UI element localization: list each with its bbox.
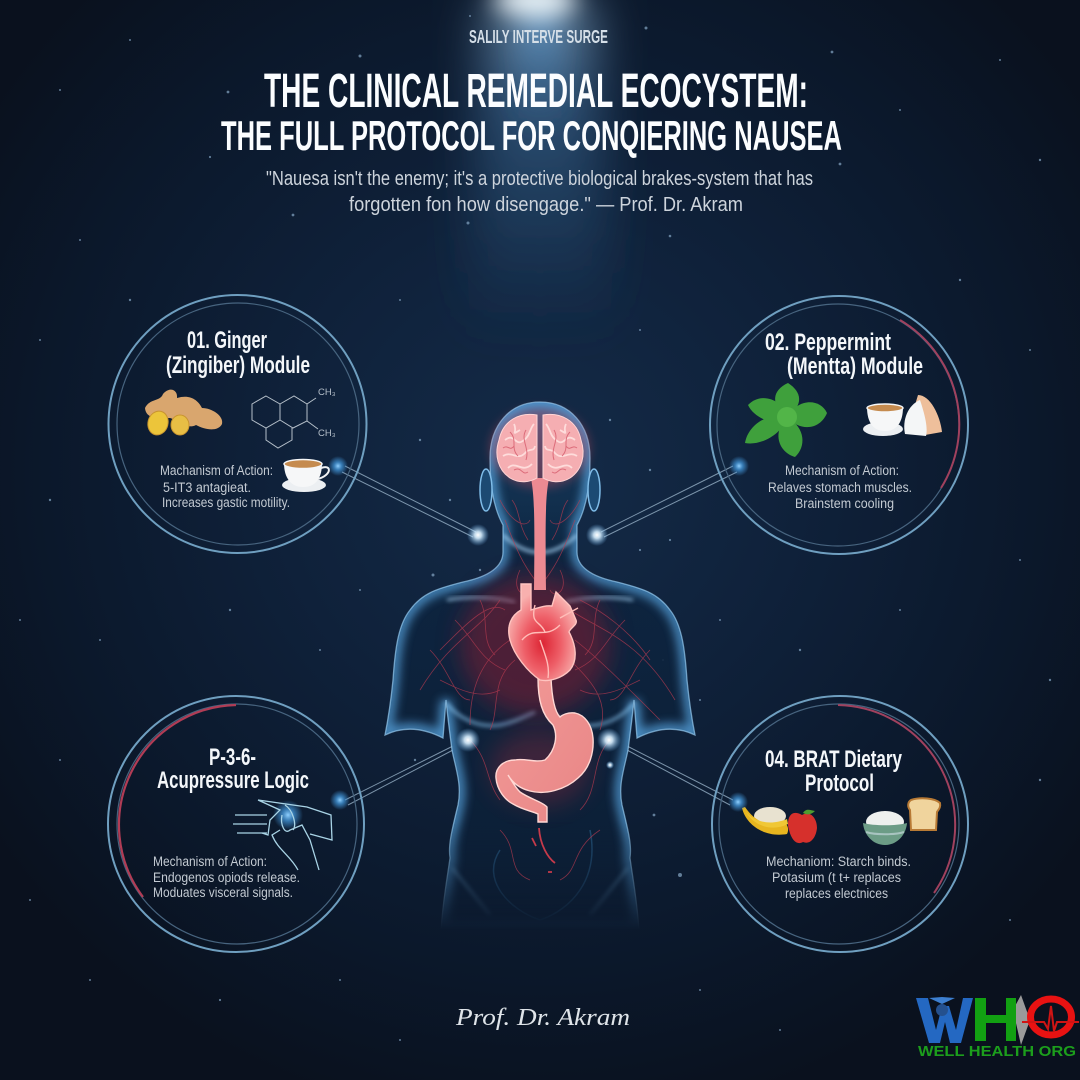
heading: 02. Peppermint <box>765 329 891 356</box>
red nerve network <box>420 500 675 880</box>
panel: 02 peppermint module <box>710 296 968 554</box>
icon: chemical structure <box>252 387 336 448</box>
connector glow points <box>456 524 621 769</box>
heading <box>157 744 309 794</box>
heading <box>765 746 902 797</box>
mechanism text: Moduates visceral signals. <box>153 885 293 900</box>
mechanism text: Mechanism of Action: <box>785 463 899 478</box>
heading: Acupressure Logic <box>157 767 309 794</box>
heading: (Zingiber) Module <box>166 352 310 379</box>
panel rings <box>108 696 364 952</box>
heading: 01. Ginger <box>187 327 267 354</box>
heart <box>509 584 578 681</box>
brain <box>497 414 583 482</box>
spinal cord <box>531 478 549 590</box>
icon: tea cup <box>282 460 329 492</box>
central human body <box>385 402 695 930</box>
mechanism text: Increases gastic motility. <box>162 495 290 510</box>
panel rings <box>108 295 366 553</box>
light beam <box>465 0 615 340</box>
mechanism text: replaces electnices <box>785 886 888 901</box>
icon: rice bowl and toast <box>863 798 940 845</box>
heading <box>166 327 310 379</box>
heading: P-3-6- <box>209 744 256 771</box>
heading: Protocol <box>805 770 874 797</box>
mechanism text <box>766 854 911 901</box>
heading: 04. BRAT Dietary <box>765 746 902 773</box>
panel rings <box>712 696 968 952</box>
node <box>729 456 749 476</box>
mechanism text: Brainstem cooling <box>795 496 894 511</box>
mechanism text <box>768 463 912 511</box>
body silhouette <box>385 402 695 930</box>
panel: 04 BRAT dietary protocol <box>712 696 968 952</box>
heading: (Mentta) Module <box>787 353 923 380</box>
ears <box>480 469 600 511</box>
connector lines <box>342 466 737 805</box>
node <box>330 790 350 810</box>
panel: 03 acupressure logic <box>108 696 364 952</box>
icon: chemical structure: CH₃ <box>318 428 336 439</box>
quote <box>266 168 813 216</box>
icon: ginger root <box>145 390 222 437</box>
mechanism text: 5-IT3 antagieat. <box>163 480 251 495</box>
quote: forgotten fon how disengage." — Prof. Dr. Akram <box>349 194 743 216</box>
signature: Prof. Dr. Akram <box>455 1005 630 1031</box>
mechanism text <box>160 463 290 510</box>
icon: banana rice apple <box>742 807 817 843</box>
heading <box>765 329 923 380</box>
node <box>328 456 348 476</box>
panel: 01 ginger module <box>108 295 366 553</box>
icon: tea cup and cold cloth <box>863 395 942 436</box>
logo: well health org <box>916 995 1079 1060</box>
icon: acupressure hand <box>233 800 332 870</box>
icon: chemical structure: CH₃ <box>318 387 336 398</box>
mechanism text: Relaves stomach muscles. <box>768 480 912 495</box>
eyebrow label: SALILY INTERVE SURGE <box>469 27 608 47</box>
icon: mint leaves <box>745 383 827 457</box>
quote: "Nauesa isn't the enemy; it's a protective biological brakes-system that has <box>266 168 813 190</box>
red glow <box>460 575 610 715</box>
node <box>728 792 748 812</box>
mechanism text <box>153 854 300 900</box>
lower red vessel <box>532 828 555 872</box>
mechanism text: Endogenos opiods release. <box>153 870 300 885</box>
esophagus and stomach <box>496 678 593 822</box>
mechanism text: Mechaniom: Starch binds. <box>766 854 911 869</box>
panel rings <box>710 296 968 554</box>
logo: well health org: WELL HEALTH ORG <box>918 1044 1076 1060</box>
mechanism text: Machanism of Action: <box>160 463 273 478</box>
mechanism text: Mechanism of Action: <box>153 854 267 869</box>
mechanism text: Potasium (t t+ replaces <box>772 870 901 885</box>
title <box>221 65 842 159</box>
